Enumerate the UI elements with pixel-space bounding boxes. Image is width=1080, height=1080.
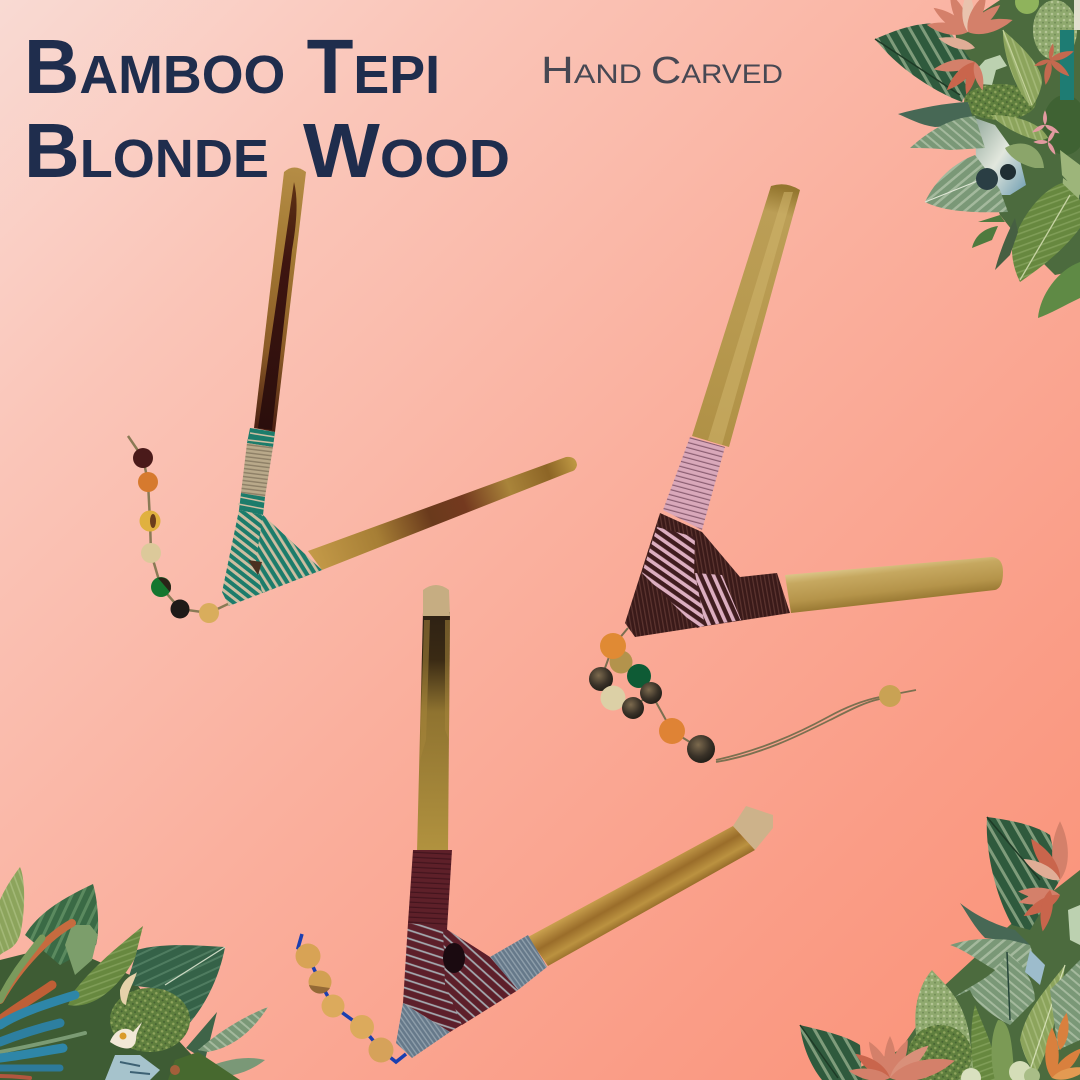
upper bamboo shaft [417, 585, 450, 852]
bead string [128, 436, 228, 623]
thread wrap [222, 428, 322, 606]
foliage: top right corner [875, 0, 1080, 318]
subtitle: hand carved: Carved [651, 50, 783, 92]
bead string [296, 934, 406, 1062]
product: maroon-wrapped bamboo tepi [296, 585, 773, 1062]
product: pink-wrapped bamboo tepi [589, 184, 1003, 763]
title: Wood [303, 108, 510, 194]
title: Bamboo Tepi [24, 24, 440, 110]
lower bamboo arm [785, 557, 1003, 613]
title: Blonde [24, 108, 269, 194]
upper bamboo shaft [254, 168, 306, 432]
product: green-wrapped bamboo tepi [128, 168, 577, 623]
lower bamboo arm [308, 457, 577, 570]
foliage: bottom right corner [800, 817, 1080, 1080]
thread wrap [625, 437, 790, 637]
subtitle: hand carved [541, 50, 783, 92]
thread wrap [396, 850, 547, 1058]
foliage: bottom left corner [0, 867, 268, 1080]
upper bamboo shaft [692, 184, 800, 447]
lower bamboo arm [528, 806, 773, 966]
subtitle: hand carved: Hand [541, 50, 642, 92]
title [24, 24, 510, 194]
bead string [589, 628, 916, 763]
